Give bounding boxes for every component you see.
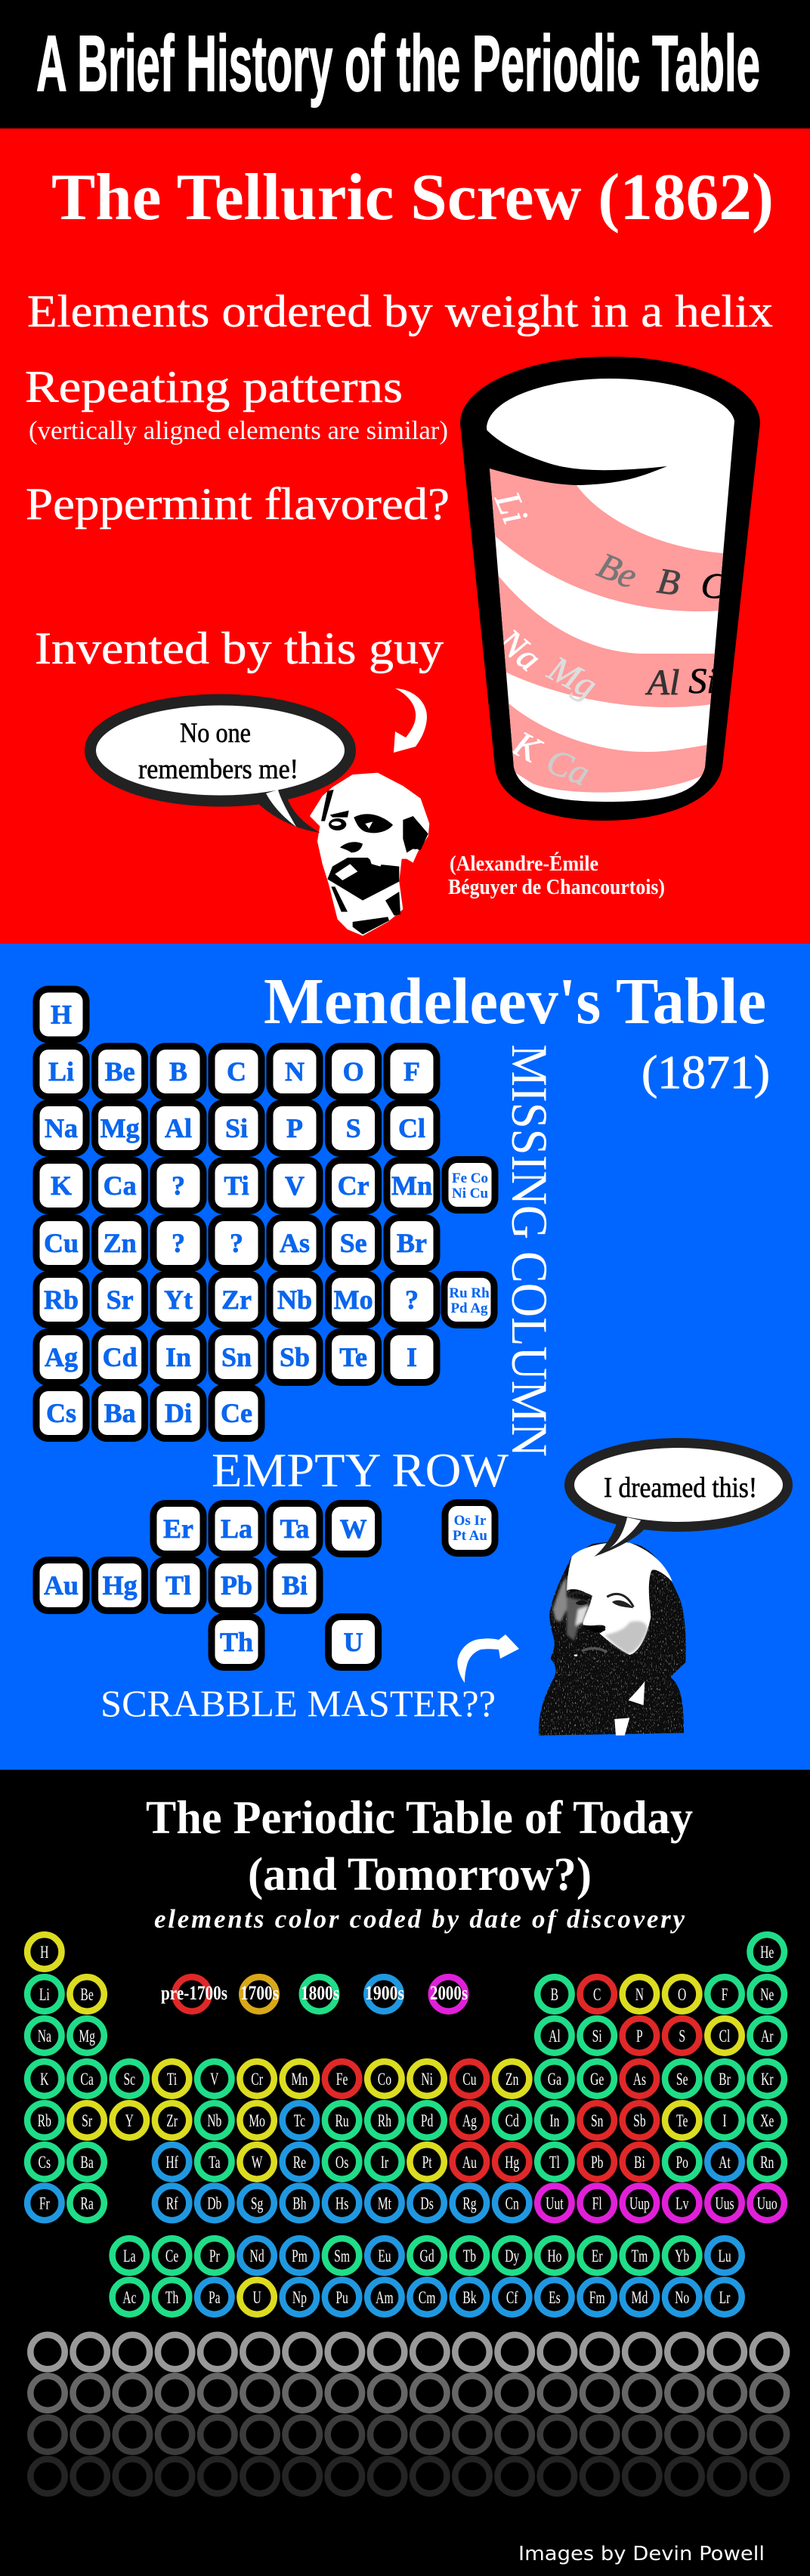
table: mendeleev element tiles: Yt — [164, 1285, 193, 1315]
table: modern periodic table main block: Ir — [381, 2153, 388, 2172]
legend: discovery eras: 1700s — [240, 1982, 279, 2004]
heading: periodic table of today: The Periodic Table of Today — [146, 1792, 693, 1844]
table: modern periodic table main block: Po — [676, 2153, 688, 2172]
subheading: color coded by date: elements color coded by date of discovery — [154, 1904, 685, 1934]
table: lanthanides and actinides: Fm — [589, 2288, 605, 2308]
credit: Images by Devin Powell — [518, 2543, 765, 2565]
text: invented by this guy: Invented by this guy — [35, 623, 444, 673]
table: mendeleev element tiles: I — [407, 1342, 417, 1372]
table: modern periodic table main block: Ds — [420, 2194, 434, 2213]
table: lanthanides and actinides: Pr — [209, 2247, 220, 2266]
table: lanthanides and actinides: Cm — [419, 2288, 435, 2308]
table: modern periodic table main block: Li — [39, 1985, 50, 2005]
table: modern periodic table main block: Ca — [80, 2070, 94, 2089]
table: mendeleev element tiles: In — [165, 1342, 191, 1372]
speech bubble: no one remembers me — [91, 700, 351, 833]
table: mendeleev element tiles: Er — [163, 1514, 193, 1544]
table: modern periodic table main block: Rn — [760, 2153, 774, 2172]
table: modern periodic table main block: Mg — [79, 2027, 95, 2046]
table: modern periodic table main block: K — [40, 2070, 48, 2089]
portrait: mendeleev — [539, 1542, 686, 1736]
table: mendeleev element tiles: C — [227, 1056, 246, 1087]
table: lanthanides and actinides: Sm — [334, 2247, 350, 2266]
bubble text line two: remembers me! — [138, 754, 298, 785]
portrait: de Chancourtois — [310, 773, 429, 935]
table: modern periodic table main block: Tc — [294, 2111, 305, 2131]
table: mendeleev element tiles: P — [286, 1113, 303, 1143]
table: modern periodic table main block: Cr — [251, 2070, 263, 2089]
table: modern periodic table main block: Sn — [591, 2111, 604, 2131]
table: mendeleev element tiles: Cl — [398, 1113, 425, 1143]
table: modern periodic table main block: Ar — [761, 2027, 774, 2046]
table: mendeleev element tiles: Au — [44, 1570, 79, 1600]
table: mendeleev element tiles: N — [285, 1056, 305, 1087]
table: modern periodic table main block: H — [40, 1943, 48, 1962]
icon: curved arrow pointing to portrait — [394, 688, 427, 753]
table: mendeleev element tiles: Sr — [107, 1285, 134, 1315]
table: mendeleev element tiles: Rb — [44, 1285, 79, 1315]
table: modern periodic table main block: Ra — [80, 2194, 94, 2213]
table: modern periodic table main block: Se — [676, 2070, 688, 2089]
table: mendeleev element tiles: Ca — [104, 1170, 137, 1201]
table: mendeleev element tiles: Sn — [221, 1342, 252, 1372]
table: lanthanides and actinides: Am — [376, 2288, 394, 2308]
icon: striped telluric screw cup: Na — [490, 620, 549, 679]
table: mendeleev element tiles: Os Ir — [454, 1513, 487, 1529]
table: mendeleev element tiles: Ba — [104, 1398, 136, 1428]
table: modern periodic table main block — [27, 1934, 784, 2220]
table: lanthanides and actinides: La — [123, 2247, 136, 2266]
icon: striped telluric screw cup: Al — [645, 663, 679, 703]
table: lanthanides and actinides: Es — [549, 2288, 561, 2308]
table: modern periodic table main block: Be — [80, 1985, 94, 2005]
legend: discovery eras: 2000s — [430, 1982, 468, 2004]
legend: discovery eras: 1900s — [365, 1982, 404, 2004]
table: mendeleev element tiles: Pd Ag — [450, 1300, 488, 1316]
table: mendeleev element tiles: Pt Au — [453, 1528, 487, 1544]
table: modern periodic table main block: Bi — [634, 2153, 645, 2172]
heading: and tomorrow: (and Tomorrow?) — [248, 1849, 592, 1900]
table: mendeleev element tiles: W — [340, 1514, 367, 1544]
table: mendeleev element tiles: ? — [230, 1228, 243, 1258]
table: lanthanides and actinides: Tm — [632, 2247, 648, 2266]
table: mendeleev element tiles: Mn — [391, 1170, 432, 1201]
table: modern periodic table main block: S — [679, 2027, 685, 2046]
table: modern periodic table main block: Sg — [251, 2194, 263, 2213]
table: mendeleev element tiles: Te — [339, 1342, 367, 1372]
icon: striped telluric screw cup: Be — [592, 545, 642, 597]
table: modern periodic table main block: Db — [207, 2194, 221, 2213]
panel: header — [0, 0, 810, 128]
table: modern periodic table main block: Y — [125, 2111, 134, 2131]
table: lanthanides and actinides: Np — [292, 2288, 307, 2308]
legend: discovery eras: pre-1700s — [161, 1982, 227, 2004]
bubble text line one: No one — [180, 718, 251, 749]
table: mendeleev element tiles: Ru Rh — [449, 1285, 490, 1301]
table: modern periodic table main block: Uus — [715, 2194, 734, 2213]
table: lanthanides and actinides: Th — [165, 2288, 178, 2308]
table: modern periodic table main block: Rg — [462, 2194, 477, 2213]
table: modern periodic table main block: Ga — [548, 2070, 561, 2089]
table: modern periodic table main block: N — [635, 1985, 644, 2005]
table: mendeleev element tiles: O — [343, 1056, 364, 1087]
table: modern periodic table main block: Ti — [167, 2070, 178, 2089]
heading: mendeleev's table: Mendeleev's Table — [264, 964, 766, 1038]
table: lanthanides and actinides: Yb — [675, 2247, 689, 2266]
table: modern periodic table main block: Nb — [207, 2111, 221, 2131]
table: mendeleev element tiles: Ta — [280, 1514, 309, 1544]
table: modern periodic table main block: Al — [549, 2027, 561, 2046]
table: lanthanides and actinides — [113, 2238, 742, 2315]
table: modern periodic table main block: Cd — [505, 2111, 519, 2131]
table: mendeleev element tiles: Fe Co — [452, 1170, 488, 1186]
table: mendeleev element tiles: V — [285, 1170, 305, 1201]
table: modern periodic table main block: Sb — [633, 2111, 646, 2131]
table: lanthanides and actinides: Ac — [122, 2288, 137, 2308]
table: mendeleev element tiles: Zn — [104, 1228, 137, 1258]
table: mendeleev element tiles: Nb — [277, 1285, 312, 1315]
legend: discovery eras — [161, 1977, 468, 2012]
table: modern periodic table main block: Xe — [760, 2111, 774, 2131]
table: mendeleev element tiles: Be — [105, 1056, 135, 1087]
table: modern periodic table main block: Cn — [505, 2194, 519, 2213]
table: modern periodic table main block: At — [719, 2153, 731, 2172]
table: modern periodic table main block: Hf — [165, 2153, 178, 2172]
table: modern periodic table main block: Br — [719, 2070, 731, 2089]
table: modern periodic table main block: Fl — [592, 2194, 602, 2213]
table: mendeleev element tiles: Mo — [334, 1285, 373, 1315]
table: lanthanides and actinides: Md — [632, 2288, 648, 2308]
table: modern periodic table main block: Sc — [123, 2070, 135, 2089]
table: modern periodic table main block: Os — [335, 2153, 348, 2172]
table: modern periodic table main block: Uuo — [757, 2194, 778, 2213]
table: lanthanides and actinides: Pu — [335, 2288, 348, 2308]
table: mendeleev element tiles: Se — [340, 1228, 367, 1258]
text: inventor name: Béguyer de Chancourtois) — [448, 875, 665, 899]
table: modern periodic table main block: Mn — [292, 2070, 308, 2089]
table: modern periodic table main block: I — [722, 2111, 727, 2131]
table: lanthanides and actinides: Pm — [292, 2247, 308, 2266]
table: mendeleev element tiles: U — [344, 1627, 363, 1657]
table: mendeleev element tiles: Li — [48, 1056, 74, 1087]
table: modern periodic table main block: Zn — [505, 2070, 519, 2089]
icon: striped telluric screw cup: Li — [487, 486, 536, 530]
table: modern periodic table main block: Ru — [335, 2111, 349, 2131]
heading: year 1871: (1871) — [642, 1047, 770, 1099]
text: vertically aligned note: (vertically aligned elements are similar) — [29, 416, 448, 445]
table: lanthanides and actinides: Lu — [718, 2247, 731, 2266]
table: modern periodic table main block: Pb — [591, 2153, 604, 2172]
table: modern periodic table main block: As — [633, 2070, 646, 2089]
icon: striped telluric screw cup: B — [655, 561, 682, 604]
table: modern periodic table main block: In — [549, 2111, 560, 2131]
text: inventor name — [448, 851, 665, 899]
table: modern periodic table main block: Zr — [166, 2111, 178, 2131]
table: modern periodic table main block: Cu — [462, 2070, 477, 2089]
table: mendeleev element tiles: Pb — [221, 1570, 252, 1600]
heading: the telluric screw: The Telluric Screw (1862) — [51, 161, 774, 234]
table: modern periodic table main block: Au — [462, 2153, 477, 2172]
table: mendeleev element tiles: Ni Cu — [452, 1186, 488, 1201]
table: mendeleev element tiles: K — [51, 1170, 72, 1201]
text: peppermint flavored: Peppermint flavored? — [26, 479, 450, 529]
table: modern periodic table main block: V — [210, 2070, 218, 2089]
table: lanthanides and actinides: U — [252, 2288, 261, 2308]
table: modern periodic table main block: Tl — [549, 2153, 560, 2172]
table: modern periodic table main block: Uup — [629, 2194, 650, 2213]
table: modern periodic table main block: C — [593, 1985, 601, 2005]
table: modern periodic table main block: Rh — [378, 2111, 391, 2131]
table: modern periodic table main block: Na — [38, 2027, 51, 2046]
table: modern periodic table main block: Co — [378, 2070, 391, 2089]
table: lanthanides and actinides: Er — [592, 2247, 603, 2266]
table: modern periodic table main block: W — [252, 2153, 263, 2172]
icon: striped telluric screw cup: Mg — [541, 648, 603, 707]
table: modern periodic table main block: F — [722, 1985, 728, 2005]
table: lanthanides and actinides: Cf — [506, 2288, 518, 2308]
text: elements ordered by weight: Elements ordered by weight in a helix — [27, 286, 773, 336]
table: lanthanides and actinides: Pa — [209, 2288, 221, 2308]
table: modern periodic table main block: Fe — [336, 2070, 348, 2089]
table: modern periodic table main block: Hs — [335, 2194, 348, 2213]
table: mendeleev element tiles: S — [346, 1113, 361, 1143]
table: mendeleev element tiles: La — [221, 1514, 252, 1544]
table: mendeleev element tiles: Ag — [45, 1342, 78, 1372]
text: inventor name: (Alexandre-Émile — [450, 851, 598, 876]
icon: striped telluric screw cup: K — [505, 723, 549, 772]
icon: striped telluric screw cup: Si — [688, 661, 717, 701]
table: mendeleev element tiles: Zr — [221, 1285, 252, 1315]
table: modern periodic table main block: Uut — [546, 2194, 564, 2213]
table: modern periodic table main block: Fr — [39, 2194, 50, 2213]
icon: striped telluric screw cup: C — [699, 564, 728, 608]
table: mendeleev element tiles: Cu — [44, 1228, 79, 1258]
speech bubble: i dreamed this — [570, 1443, 787, 1557]
table: modern periodic table main block: Ne — [760, 1985, 774, 2005]
table: modern periodic table main block: P — [636, 2027, 643, 2046]
label: missing column: MISSING COLUMN — [501, 1044, 558, 1457]
table: modern periodic table main block: Sr — [82, 2111, 92, 2131]
table: mendeleev element tiles: B — [169, 1056, 187, 1087]
table: modern periodic table main block: B — [551, 1985, 558, 2005]
table: mendeleev element tiles: Di — [165, 1398, 192, 1428]
icon: striped telluric screw cup — [460, 357, 760, 821]
table: mendeleev element tiles: As — [280, 1228, 310, 1258]
label: empty row: EMPTY ROW — [212, 1443, 509, 1497]
table: modern periodic table main block: Rb — [38, 2111, 51, 2131]
table: modern periodic table main block: Ag — [462, 2111, 477, 2131]
table: lanthanides and actinides: Lr — [719, 2288, 731, 2308]
table: mendeleev element tiles: Ce — [221, 1398, 252, 1428]
table: mendeleev element tiles: Sb — [280, 1342, 310, 1372]
table: modern periodic table main block: Pt — [422, 2153, 432, 2172]
label: scrabble master: SCRABBLE MASTER?? — [100, 1682, 496, 1724]
table: mendeleev element tiles: Cs — [46, 1398, 76, 1428]
table: lanthanides and actinides: Dy — [505, 2247, 519, 2266]
table: mendeleev element tiles: Al — [165, 1113, 192, 1143]
table: lanthanides and actinides: Eu — [378, 2247, 391, 2266]
table: mendeleev element tiles: Tl — [165, 1570, 191, 1600]
table: mendeleev element tiles: ? — [172, 1170, 185, 1201]
table: modern periodic table main block: Ge — [590, 2070, 604, 2089]
table: mendeleev element tiles: Ti — [224, 1170, 249, 1201]
table: modern periodic table main block: Re — [293, 2153, 306, 2172]
fading empty rings: undiscovered elements — [30, 2335, 787, 2494]
table: mendeleev element tiles: ? — [172, 1228, 185, 1258]
table: modern periodic table main block: Ba — [80, 2153, 94, 2172]
table: modern periodic table main block: Mo — [249, 2111, 265, 2131]
table: mendeleev element tiles: Si — [225, 1113, 248, 1143]
table: modern periodic table main block: Bh — [292, 2194, 307, 2213]
table: modern periodic table main block: Hg — [505, 2153, 519, 2172]
table: mendeleev element tiles — [36, 989, 495, 1667]
table: lanthanides and actinides: Nd — [250, 2247, 264, 2266]
table: lanthanides and actinides: Gd — [420, 2247, 434, 2266]
table: modern periodic table main block: Mt — [378, 2194, 391, 2213]
table: mendeleev element tiles: H — [51, 999, 72, 1029]
table: modern periodic table main block: Kr — [761, 2070, 774, 2089]
table: mendeleev element tiles: Cr — [338, 1170, 369, 1201]
table: modern periodic table main block: Cl — [719, 2027, 731, 2046]
table: lanthanides and actinides: Tb — [463, 2247, 476, 2266]
table: mendeleev element tiles: Th — [220, 1627, 253, 1657]
panel: mendeleev's table — [0, 944, 810, 1770]
table: mendeleev element tiles: Bi — [282, 1570, 308, 1600]
bubble text: I dreamed this! — [604, 1472, 757, 1504]
table: modern periodic table main block: Rf — [166, 2194, 178, 2213]
table: modern periodic table main block: Cs — [39, 2153, 51, 2172]
table: mendeleev element tiles: Na — [45, 1113, 78, 1143]
table: modern periodic table main block: Ni — [421, 2070, 433, 2089]
panel: the telluric screw — [0, 128, 810, 944]
table: modern periodic table main block: O — [678, 1985, 686, 2005]
text: repeating patterns: Repeating patterns — [25, 362, 403, 412]
table: modern periodic table main block: He — [760, 1943, 774, 1962]
legend: discovery eras: 1800s — [301, 1982, 339, 2004]
table: lanthanides and actinides: Ho — [547, 2247, 562, 2266]
table: mendeleev element tiles: Cd — [103, 1342, 138, 1372]
panel: the periodic table of today — [0, 1770, 810, 2576]
table: mendeleev element tiles: Br — [397, 1228, 427, 1258]
table: mendeleev element tiles: F — [403, 1056, 420, 1087]
table: modern periodic table main block: Lv — [676, 2194, 689, 2213]
table: lanthanides and actinides: No — [675, 2288, 689, 2308]
table: lanthanides and actinides: Ce — [165, 2247, 178, 2266]
table: mendeleev element tiles: ? — [405, 1285, 419, 1315]
table: modern periodic table main block: Ta — [209, 2153, 221, 2172]
table: lanthanides and actinides: Bk — [462, 2288, 477, 2308]
table: modern periodic table main block: Pd — [421, 2111, 433, 2131]
table: mendeleev element tiles: Mg — [100, 1113, 140, 1143]
table: mendeleev element tiles: Hg — [103, 1570, 138, 1600]
icon: striped telluric screw cup: Ca — [541, 741, 595, 794]
table: modern periodic table main block: Si — [592, 2027, 602, 2046]
icon: curved arrow pointing to mendeleev — [457, 1634, 519, 1683]
table: modern periodic table main block: Te — [676, 2111, 688, 2131]
